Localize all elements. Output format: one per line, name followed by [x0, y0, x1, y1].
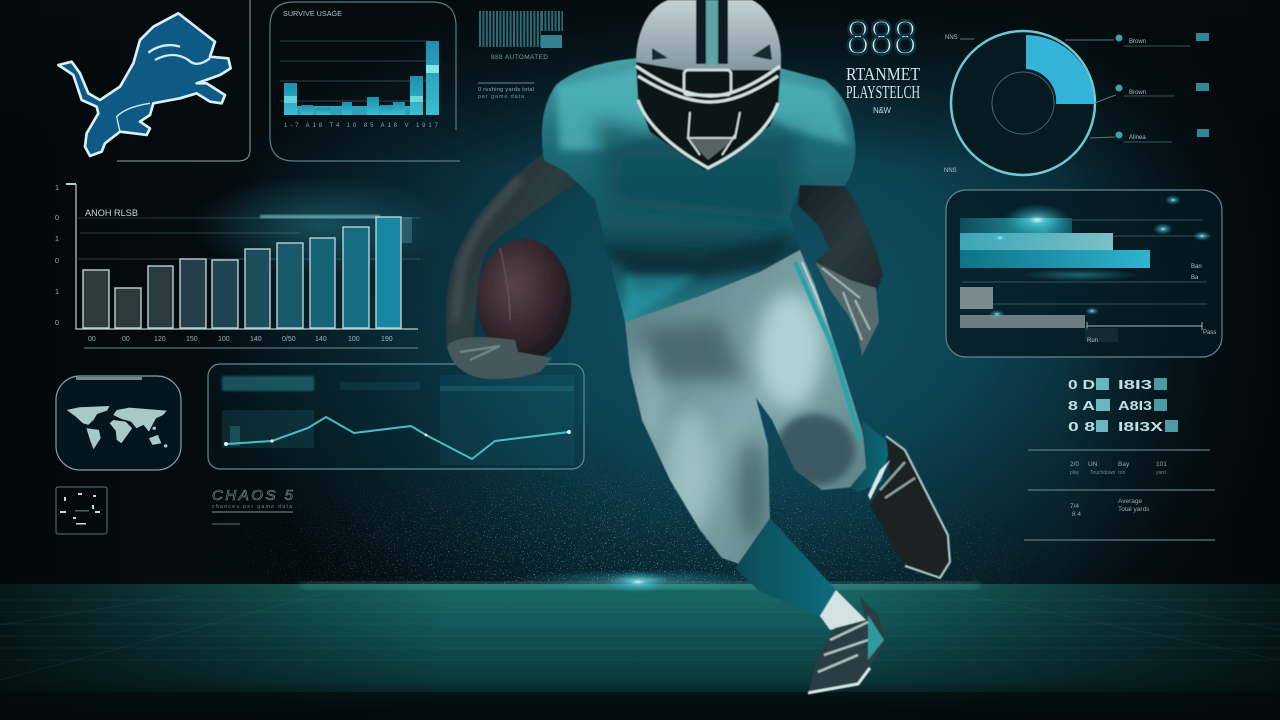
panel: lower right table: 101: [1156, 461, 1167, 468]
bars: [284, 41, 439, 115]
panel: mini bar chart: [270, 2, 460, 161]
glow highlights: [989, 195, 1211, 318]
axis labels: 00: [122, 336, 130, 343]
line series: [226, 417, 569, 459]
panel: donut chart: NNS: [945, 35, 958, 41]
legend: Brown: [1129, 90, 1146, 96]
panel: lower right table: play: [1070, 470, 1080, 476]
socks: [850, 420, 890, 492]
axis labels: 1: [55, 185, 59, 192]
white sock: [820, 590, 866, 630]
text block: top centre data strip: 888 AUTOMATED: [491, 54, 548, 61]
panel: horizontal bars: Pass: [1203, 330, 1216, 336]
panel: lower right table: 2/0: [1070, 461, 1079, 468]
axis labels: 120: [154, 336, 166, 343]
panel: donut chart: [944, 31, 1209, 175]
axis labels: 00: [88, 336, 96, 343]
left arm: [446, 150, 578, 352]
axis labels: 140: [315, 336, 327, 343]
text block: lower left stat title: chances per game data: [212, 504, 292, 510]
axis labels: 0/50: [282, 336, 296, 343]
axis labels: 150: [186, 336, 198, 343]
bars: [83, 217, 401, 328]
text block: stat caption: RTANMET: [846, 64, 920, 84]
heading: mini chart title: SURVIVE USAGE: [283, 9, 342, 18]
text block: stat rows: 8 A: [1068, 398, 1096, 413]
right shoe: [868, 436, 950, 578]
icon: leaping lion logo: [58, 13, 231, 156]
text block: stat rows: [1068, 377, 1178, 434]
big stat: 888: 888: [846, 12, 917, 65]
panel: lower right table: Touchdown: [1090, 470, 1116, 476]
panel: lower right table: 8 4: [1072, 511, 1081, 518]
donut highlighted segment: [1026, 35, 1094, 104]
legend: [960, 33, 1209, 142]
axis labels: 100: [218, 336, 230, 343]
player: [446, 0, 950, 694]
big stat: 888: N&W: [873, 106, 891, 115]
text block: top centre data strip: 0 rushing yards total: [478, 87, 534, 93]
panel: lower right table: [1024, 450, 1215, 540]
panel: lower right table: Average: [1118, 498, 1142, 505]
panel: lower right table: Total yards: [1118, 506, 1150, 513]
axis labels: 1: [55, 289, 59, 296]
right arm: [798, 184, 883, 292]
panel: horizontal bars: [946, 190, 1222, 357]
axis labels: 1-7 A18 T4 10 85 A18 V 1917: [284, 123, 439, 129]
text block: stat rows: I8I3: [1118, 377, 1152, 392]
panel: lower right table: UN: [1088, 461, 1098, 468]
text block: stat rows: 0 8: [1068, 419, 1095, 434]
legend: Brown: [1129, 39, 1146, 45]
big stat: 888: PLAYSTELCH: [846, 82, 920, 102]
text block: stat rows: A8I3: [1118, 398, 1152, 413]
panel: lower right table: yard: [1156, 470, 1166, 476]
panel: horizontal bars: Run: [1087, 338, 1098, 344]
left hand: [447, 337, 552, 379]
left cleat: [808, 597, 886, 694]
panel: lower right table: 7/4: [1070, 503, 1079, 510]
pants: [624, 250, 867, 564]
panel: world map: [56, 376, 181, 470]
panel: horizontal bars: Ban: [1191, 264, 1202, 270]
axis labels: 1: [55, 236, 59, 243]
right glove: [815, 262, 879, 356]
panel: lower right table: Bay: [1118, 461, 1130, 468]
heading: column chart title: ANOH RLSB: [85, 208, 138, 219]
axis labels: 0: [55, 320, 59, 327]
panel: lower right table: run: [1118, 470, 1125, 476]
axis labels: 140: [250, 336, 262, 343]
text block: stat rows: I8I3X: [1118, 419, 1163, 434]
panel: horizontal bars: Ba: [1191, 275, 1199, 281]
panel: team logo: [58, 0, 250, 161]
face mask: [636, 66, 780, 168]
axis labels: 0: [55, 258, 59, 265]
icon: world map: [67, 406, 167, 449]
text block: stat rows: 0 D: [1068, 377, 1095, 392]
football: [477, 239, 571, 361]
text block: lower left stat title: [212, 487, 294, 524]
panel: column chart: [55, 175, 450, 348]
jersey: [541, 58, 856, 322]
panel: line chart: [208, 364, 584, 469]
axis labels: [55, 185, 393, 343]
field: [0, 569, 1280, 720]
bars: [960, 218, 1072, 233]
text block: top centre data strip: per game data: [478, 94, 525, 100]
text block: lower left stat title: CHAOS 5: [212, 487, 294, 504]
axis labels: 0: [55, 215, 59, 222]
text block: top centre data strip: [478, 21, 563, 100]
big stat: 888: [846, 12, 920, 115]
icon: small radar square: [56, 487, 107, 534]
panel: donut chart: NNS: [944, 168, 957, 174]
helmet: [636, 0, 781, 170]
legend: Alinea: [1129, 135, 1146, 141]
axis labels: 190: [381, 336, 393, 343]
axis labels: 100: [348, 336, 360, 343]
background: [196, 20, 1207, 584]
